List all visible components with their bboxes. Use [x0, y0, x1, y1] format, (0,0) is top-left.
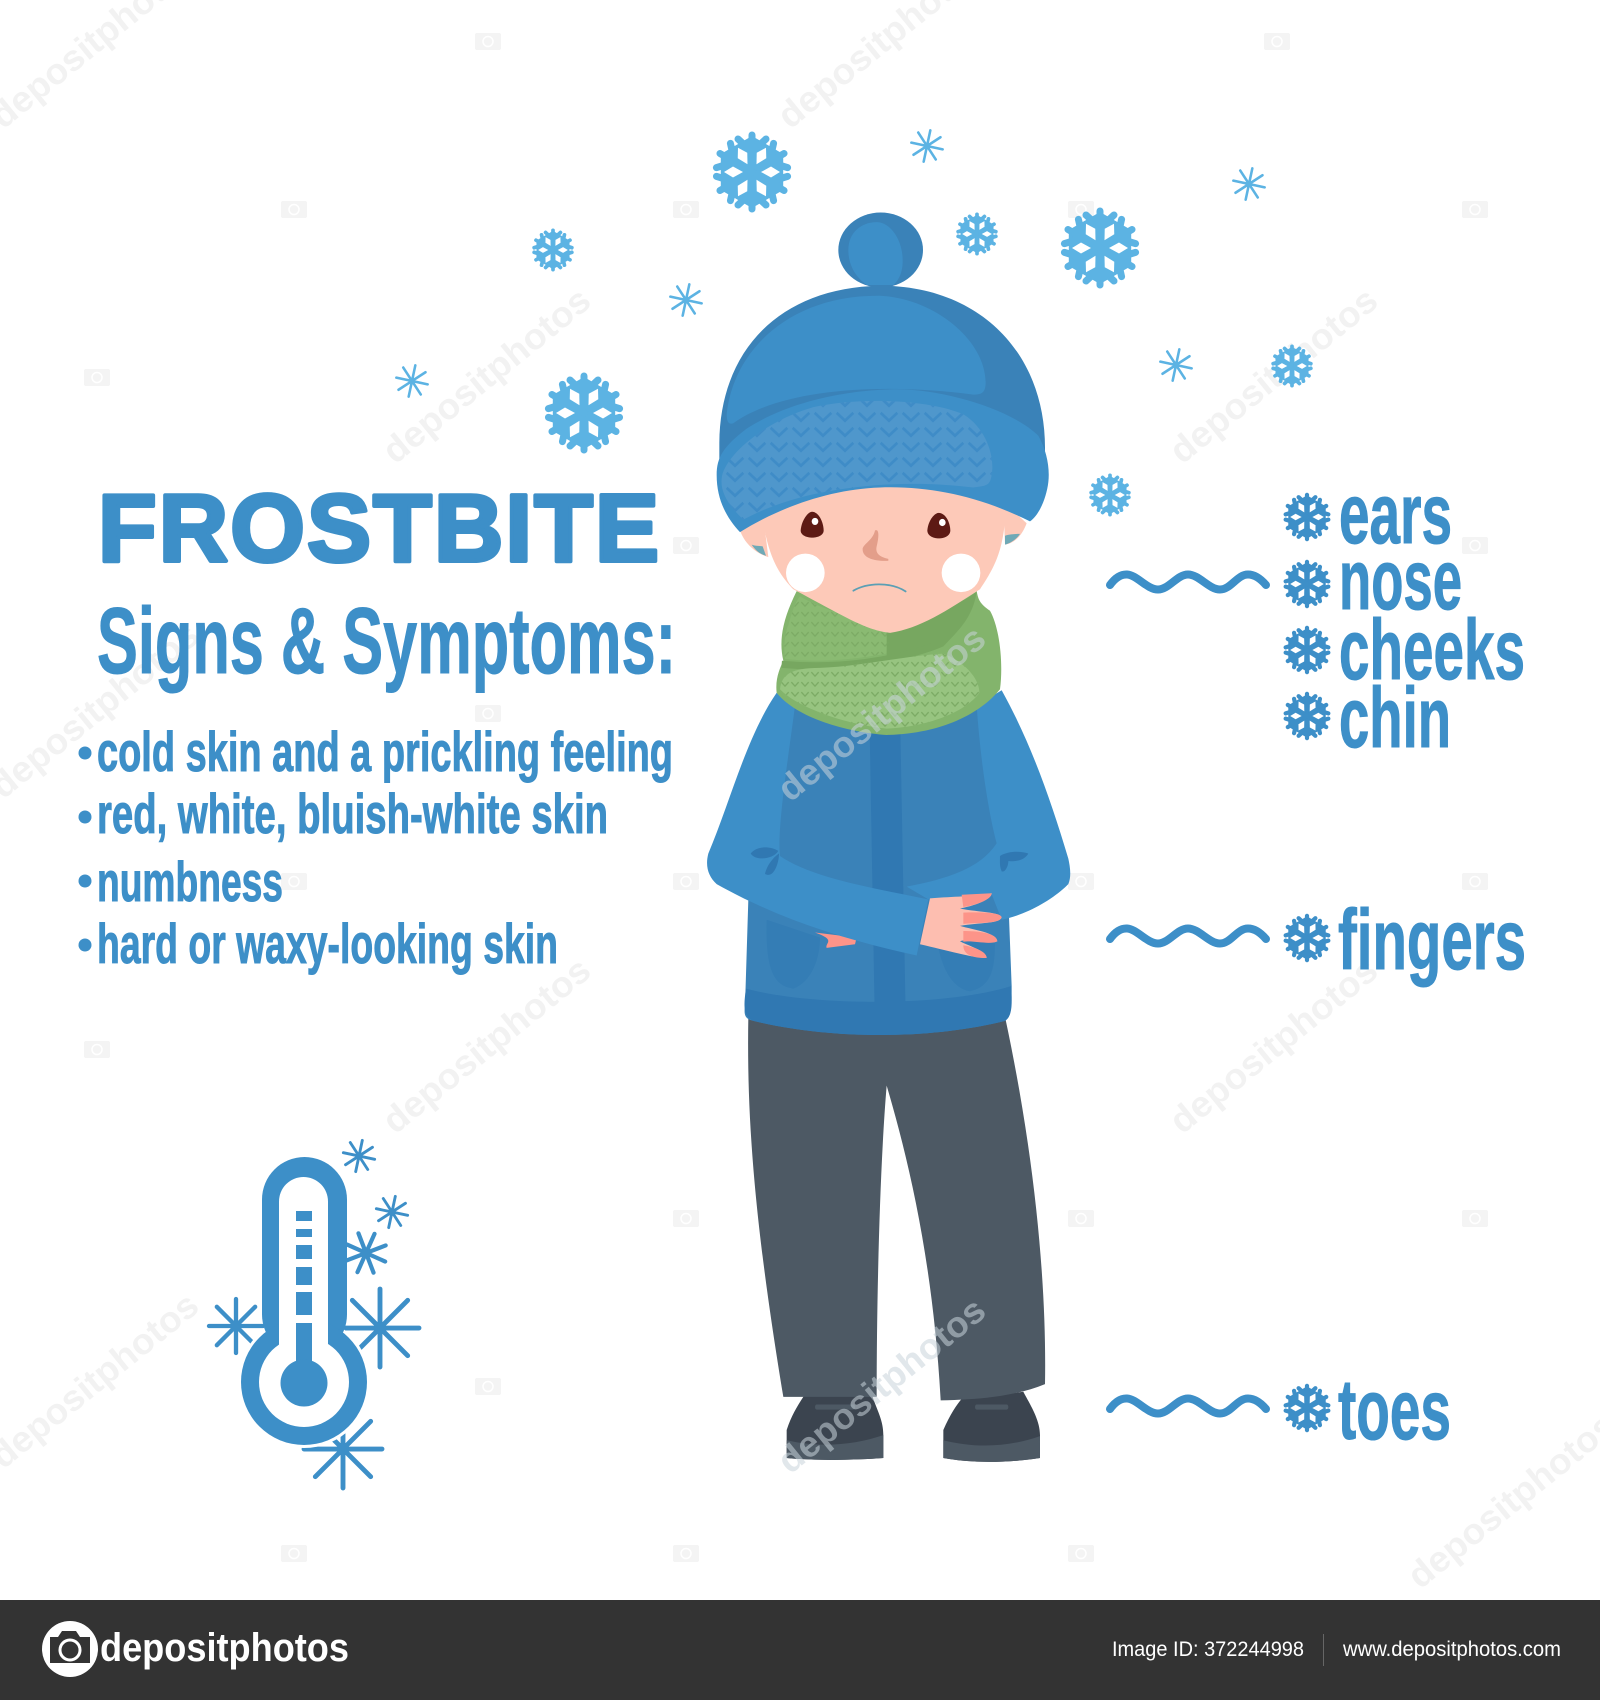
- left shoe: [787, 1394, 883, 1460]
- left sleeve: [707, 693, 928, 956]
- snowflake bullet fingers: [1284, 916, 1330, 960]
- jacket lower body: [745, 899, 1012, 1035]
- hat knit texture: [721, 401, 992, 520]
- footer divider: [1323, 1634, 1324, 1666]
- face: [758, 471, 1007, 633]
- zip placket: [869, 711, 906, 1034]
- falling snowflakes around the child: [393, 127, 1313, 515]
- label ears: ears: [1339, 467, 1452, 562]
- nose: [863, 530, 888, 561]
- pocket right: [938, 938, 995, 991]
- bullet: [78, 746, 92, 760]
- symptoms list: [78, 720, 673, 975]
- image id: Image ID: 372244998: [1112, 1638, 1304, 1661]
- thermometer body: [238, 1157, 370, 1448]
- wave pointer to toes: [1110, 1398, 1266, 1414]
- small star: [1230, 165, 1268, 203]
- medium snowflake: [956, 214, 998, 254]
- medium snowflake: [532, 230, 574, 270]
- trousers and shoes: [748, 1017, 1045, 1462]
- wave pointer to fingers: [1110, 928, 1266, 944]
- symptom 3: numbness: [97, 850, 283, 913]
- watermarks on background: depositphotos: [1161, 279, 1385, 471]
- symptom 4: hard or waxy-looking skin: [97, 912, 558, 975]
- website: www.depositphotos.com: [1342, 1638, 1561, 1661]
- frost stars: [209, 1137, 419, 1488]
- eye left: [801, 512, 824, 538]
- logo wordmark: depositphotos: [100, 1626, 349, 1670]
- eye right: [927, 513, 950, 538]
- symptom 2: red, white, bluish-white skin: [97, 782, 608, 845]
- left text panel: [78, 475, 676, 975]
- symptom 1: cold skin and a prickling feeling: [97, 720, 673, 783]
- right labels: affected body parts: [1110, 467, 1526, 1458]
- watermarks on figure: depositphotos: [769, 1289, 993, 1481]
- bullet: [78, 810, 92, 824]
- trousers: [748, 1017, 1045, 1400]
- footer bar: [0, 1600, 1600, 1700]
- title: FROSTBITE: [98, 475, 659, 582]
- watermarks on figure: [769, 617, 993, 1481]
- ears: [740, 502, 1027, 557]
- snowflake bullet nose: [1284, 562, 1330, 606]
- small star: [393, 362, 431, 400]
- pocket left: [767, 920, 820, 989]
- skin: [758, 471, 1007, 633]
- subtitle: Signs & Symptoms:: [97, 588, 676, 693]
- large snowflake top: [713, 135, 791, 209]
- watermarks on figure: depositphotos: [769, 617, 993, 809]
- small star: [908, 127, 946, 165]
- fingertips: [962, 893, 1002, 958]
- watermarks on background: depositphotos: [374, 279, 598, 471]
- scarf: [776, 591, 1001, 735]
- logo mark: [42, 1621, 98, 1677]
- snowflake bullet cheeks: [1284, 628, 1330, 672]
- snowflake bullet ears: [1284, 495, 1330, 539]
- medium snowflake: [1271, 346, 1313, 386]
- frostbitten cheek left: [786, 554, 825, 592]
- medium snowflake: [1089, 475, 1131, 515]
- mouth: [853, 584, 906, 591]
- pompom: [838, 212, 923, 287]
- large snowflake left: [545, 376, 623, 450]
- hand: [920, 893, 1002, 958]
- jacket hem: [744, 986, 1012, 1035]
- faint camera watermarks: [84, 33, 1488, 1562]
- watermarks on background: depositphotos: [374, 949, 598, 1141]
- wave pointer to face: [1110, 574, 1266, 590]
- jacket chest: [770, 695, 1000, 907]
- small star: [1157, 346, 1195, 384]
- snowflake bullet toes: [1284, 1386, 1330, 1430]
- eye left glint: [812, 518, 818, 525]
- head and hat: [717, 212, 1049, 735]
- second hand fingertips: [815, 933, 857, 948]
- frostbitten cheek right: [942, 554, 980, 592]
- child figure: [707, 212, 1070, 1481]
- watermarks on background: depositphotos: [1161, 949, 1385, 1141]
- right shoe: [943, 1392, 1040, 1462]
- large snowflake right: [1061, 211, 1139, 285]
- label toes: toes: [1338, 1363, 1451, 1458]
- bullet: [78, 874, 92, 888]
- small star: [667, 281, 705, 319]
- right sleeve: [907, 690, 1070, 920]
- jacket and hands: [707, 690, 1070, 1035]
- bullet: [78, 938, 92, 952]
- eye right glint: [939, 519, 946, 526]
- snowflake bullet chin: [1284, 694, 1330, 738]
- label chin: chin: [1339, 671, 1451, 766]
- cuff buttons: [751, 847, 1028, 875]
- hat crown highlight: [727, 296, 986, 424]
- thermometer icon with frost stars: [209, 1137, 419, 1488]
- label nose: nose: [1339, 533, 1462, 628]
- hat band: [717, 389, 1049, 532]
- hat crown: [719, 286, 1045, 471]
